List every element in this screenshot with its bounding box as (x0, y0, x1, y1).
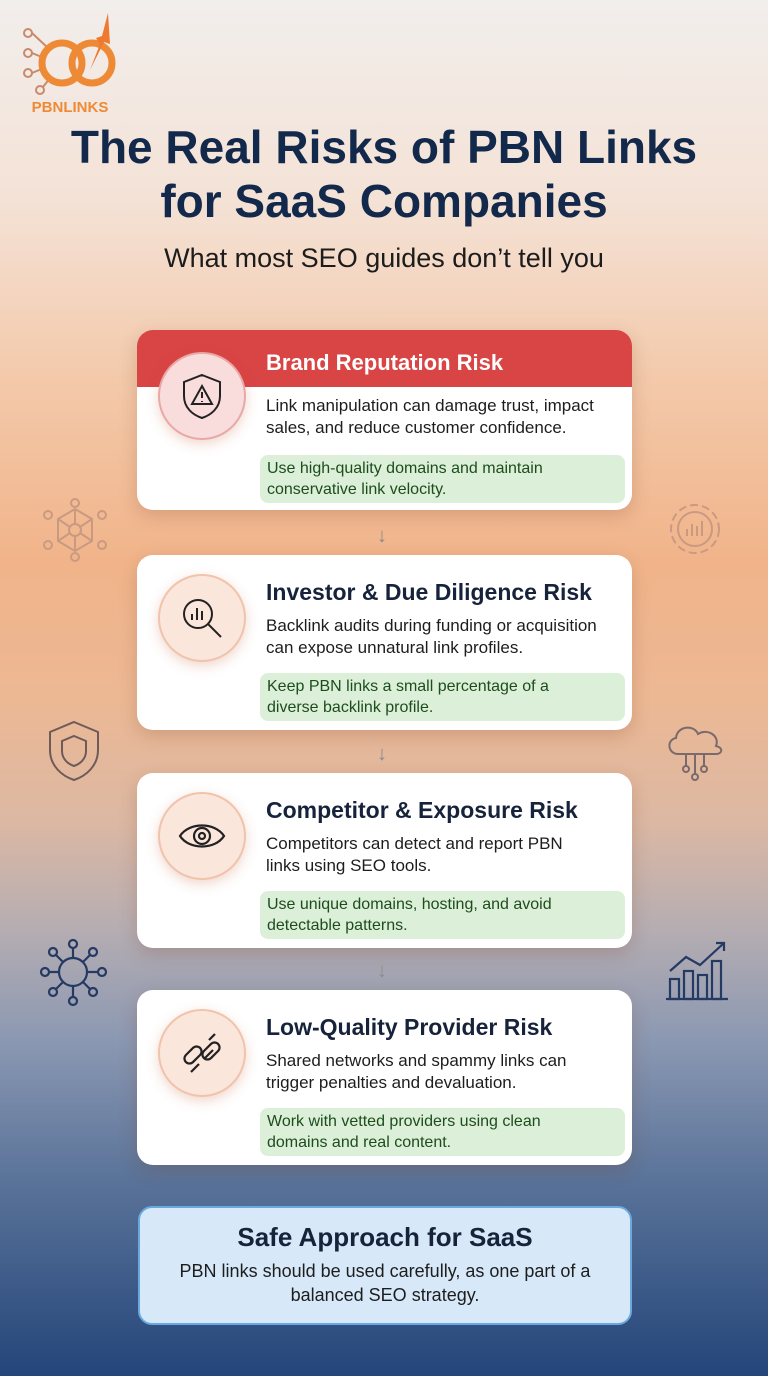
tip: Use high-quality domains and maintain (267, 460, 543, 477)
icon: eye (158, 792, 246, 880)
tip: domains and real content. (267, 1134, 451, 1151)
logo (23, 13, 116, 116)
icon: virus network left (40, 938, 108, 1006)
card 1: brand reputation (137, 330, 632, 510)
arrow: ↓ (377, 525, 387, 547)
safe approach box (138, 1206, 632, 1325)
description: Shared networks and spammy links can (266, 1051, 566, 1070)
tip (260, 891, 625, 939)
tip: detectable patterns. (267, 917, 408, 934)
icon: broken link (158, 1009, 246, 1097)
subtitle: What most SEO guides don’t tell you (164, 243, 604, 273)
text: balanced SEO strategy. (291, 1285, 479, 1305)
description: Link manipulation can damage trust, impact (266, 396, 594, 415)
icon: network left (43, 498, 107, 562)
tip (260, 1108, 625, 1156)
tip (260, 455, 625, 503)
card 4: low-quality provider (137, 990, 632, 1165)
icon: shield warning (158, 352, 246, 440)
description: sales, and reduce customer confidence. (266, 418, 567, 437)
heading: Brand Reputation Risk (266, 350, 503, 375)
heading: Competitor & Exposure Risk (266, 797, 578, 823)
description: can expose unnatural link profiles. (266, 638, 523, 657)
tip: Use unique domains, hosting, and avoid (267, 896, 552, 913)
heading: Low-Quality Provider Risk (266, 1014, 552, 1040)
description: trigger penalties and devaluation. (266, 1073, 516, 1092)
icon: gear chart right (670, 504, 720, 554)
description: Competitors can detect and report PBN (266, 834, 563, 853)
text: PBN links should be used carefully, as one part of a (180, 1261, 590, 1281)
title (71, 121, 697, 227)
card 2: investor (137, 555, 632, 730)
text (180, 1261, 590, 1305)
description: links using SEO tools. (266, 856, 431, 875)
logo: PBNLINKS (32, 99, 108, 116)
arrow: ↓ (377, 960, 387, 982)
icon: shield left (49, 720, 99, 781)
description (266, 616, 597, 657)
description (266, 834, 563, 875)
title: The Real Risks of PBN Links (71, 121, 697, 173)
tip: conservative link velocity. (267, 481, 446, 498)
arrow: ↓ (377, 743, 387, 765)
icon: cloud right (668, 726, 722, 781)
tip (260, 673, 625, 721)
description (266, 396, 594, 437)
description (266, 1051, 566, 1092)
icon: magnifier chart (158, 574, 246, 662)
title: for SaaS Companies (160, 175, 608, 227)
icon: bar chart right (666, 942, 728, 1000)
tip: Work with vetted providers using clean (267, 1113, 541, 1130)
heading: Safe Approach for SaaS (237, 1222, 533, 1252)
tip: diverse backlink profile. (267, 699, 433, 716)
heading: Investor & Due Diligence Risk (266, 579, 592, 605)
tip: Keep PBN links a small percentage of a (267, 678, 549, 695)
card 3: competitor (137, 773, 632, 948)
description: Backlink audits during funding or acquisition (266, 616, 597, 635)
